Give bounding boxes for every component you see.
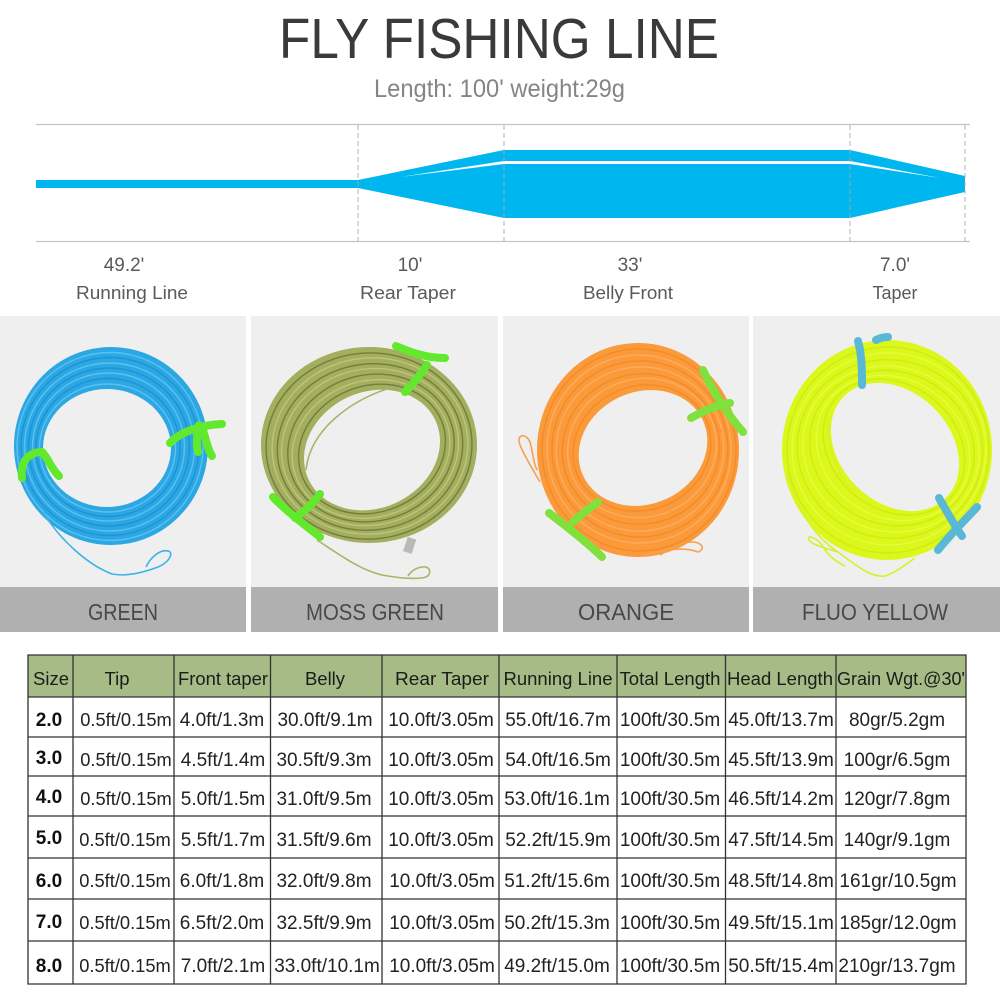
- row size 4.0: 4.0: [36, 787, 62, 808]
- icon: blue coil: [14, 347, 208, 575]
- row size 6.0: 6.0: [36, 871, 62, 892]
- row size 2.0: 4.0ft/1.3m: [180, 710, 264, 731]
- row size 8.0: 7.0ft/2.1m: [181, 956, 265, 977]
- row size 2.0: 100ft/30.5m: [620, 710, 720, 731]
- table grid: [28, 655, 966, 984]
- specification table: [28, 655, 966, 984]
- panel: orange line coil: [503, 316, 749, 632]
- row size 4.0: 46.5ft/14.2m: [728, 789, 834, 810]
- subtitle: Length: 100' weight:29g: [374, 75, 625, 103]
- table header row: [28, 655, 966, 697]
- row size 2.0: [36, 709, 945, 731]
- row size 4.0: 120gr/7.8gm: [844, 789, 950, 810]
- row size 8.0: 33.0ft/10.1m: [274, 956, 380, 977]
- row size 4.0: 53.0ft/16.1m: [504, 789, 610, 810]
- row size 5.0: 140gr/9.1gm: [844, 830, 950, 851]
- row size 2.0: 0.5ft/0.15m: [80, 709, 172, 730]
- row size 7.0: 49.5ft/15.1m: [728, 913, 834, 934]
- row size 3.0: 10.0ft/3.05m: [388, 750, 494, 771]
- icon: orange coil: [519, 343, 741, 557]
- row size 8.0: 50.5ft/15.4m: [728, 956, 834, 977]
- row size 2.0: 10.0ft/3.05m: [388, 710, 494, 731]
- row size 5.0: 0.5ft/0.15m: [79, 829, 171, 850]
- section labels: Belly Front: [583, 283, 673, 303]
- row size 3.0: 3.0: [36, 748, 62, 769]
- row size 5.0: 31.5ft/9.6m: [276, 830, 372, 851]
- table header row: Belly: [305, 668, 346, 689]
- row size 5.0: [36, 828, 950, 851]
- row size 6.0: 100ft/30.5m: [620, 871, 720, 892]
- row size 7.0: [36, 912, 957, 934]
- row size 8.0: 0.5ft/0.15m: [79, 955, 171, 976]
- section labels: 10': [398, 255, 422, 276]
- table header row: Grain Wgt.@30': [837, 668, 965, 689]
- row size 7.0: 32.5ft/9.9m: [276, 913, 372, 934]
- icon: green pipe cleaners: [22, 424, 222, 478]
- row size 8.0: 49.2ft/15.0m: [504, 956, 610, 977]
- panel: moss green line coil: [251, 316, 498, 632]
- row size 6.0: 0.5ft/0.15m: [79, 870, 171, 891]
- table header row: Running Line: [504, 668, 612, 689]
- row size 7.0: 7.0: [36, 912, 62, 933]
- row size 4.0: 100ft/30.5m: [620, 789, 720, 810]
- panel: fluo yellow line coil: FLUO YELLOW: [802, 599, 948, 625]
- row size 2.0: 45.0ft/13.7m: [728, 710, 834, 731]
- row size 7.0: 10.0ft/3.05m: [389, 913, 495, 934]
- row size 8.0: 10.0ft/3.05m: [389, 956, 495, 977]
- panel: green line coil: GREEN: [88, 599, 158, 625]
- row size 5.0: 5.5ft/1.7m: [181, 830, 265, 851]
- panel: green line coil: [0, 316, 246, 632]
- row size 3.0: 45.5ft/13.9m: [728, 750, 834, 771]
- white highlight stripe: [400, 161, 940, 178]
- row size 8.0: [36, 955, 956, 977]
- row size 2.0: 2.0: [36, 710, 62, 731]
- row size 8.0: 100ft/30.5m: [620, 956, 720, 977]
- icon: blue pipe cleaners: [858, 337, 977, 550]
- section labels: Taper: [872, 283, 918, 303]
- tapered line profile: [36, 150, 965, 218]
- section labels: 49.2': [104, 255, 144, 276]
- row size 4.0: 5.0ft/1.5m: [181, 789, 265, 810]
- row size 2.0: 80gr/5.2gm: [849, 710, 945, 731]
- row size 4.0: [36, 787, 950, 810]
- row size 6.0: [36, 870, 957, 892]
- icon: green pipe cleaners: [549, 370, 743, 557]
- row size 4.0: 0.5ft/0.15m: [80, 788, 172, 809]
- row size 3.0: 0.5ft/0.15m: [80, 749, 172, 770]
- row size 2.0: 30.0ft/9.1m: [277, 710, 373, 731]
- row size 4.0: 10.0ft/3.05m: [388, 789, 494, 810]
- panel: moss green line coil: MOSS GREEN: [306, 599, 444, 625]
- icon: green pipe cleaners: [273, 346, 445, 537]
- icon: moss coil: [260, 346, 478, 578]
- title: FLY FISHING LINE: [279, 7, 719, 71]
- row size 6.0: 6.0ft/1.8m: [180, 871, 264, 892]
- table header row: Total Length: [620, 668, 720, 689]
- row size 3.0: 4.5ft/1.4m: [181, 750, 265, 771]
- row size 5.0: 10.0ft/3.05m: [388, 830, 494, 851]
- icon: yellow coil: [775, 336, 1000, 576]
- row size 6.0: 161gr/10.5gm: [839, 871, 957, 892]
- row size 4.0: 31.0ft/9.5m: [276, 789, 372, 810]
- row size 5.0: 100ft/30.5m: [620, 830, 720, 851]
- row size 8.0: 8.0: [36, 956, 62, 977]
- row size 3.0: 100ft/30.5m: [620, 750, 720, 771]
- section labels: 33': [618, 255, 642, 276]
- row size 6.0: 48.5ft/14.8m: [728, 871, 834, 892]
- section labels: 7.0': [880, 255, 910, 276]
- row size 3.0: 100gr/6.5gm: [844, 750, 950, 771]
- table header row: Head Length: [727, 668, 833, 689]
- row size 7.0: 0.5ft/0.15m: [79, 912, 171, 933]
- row size 7.0: 6.5ft/2.0m: [180, 913, 264, 934]
- line taper diagram: [36, 124, 970, 242]
- section labels: [76, 255, 918, 303]
- panel: orange line coil: ORANGE: [578, 599, 674, 625]
- row size 3.0: [36, 748, 950, 771]
- table header row: Size: [33, 668, 69, 689]
- product tag: [403, 537, 416, 554]
- table header row: Rear Taper: [395, 668, 489, 689]
- row size 5.0: 47.5ft/14.5m: [728, 830, 834, 851]
- row size 5.0: 5.0: [36, 828, 62, 849]
- table header row: Front taper: [178, 668, 268, 689]
- row size 6.0: 32.0ft/9.8m: [276, 871, 372, 892]
- row size 8.0: 210gr/13.7gm: [838, 956, 956, 977]
- row size 7.0: 100ft/30.5m: [620, 913, 720, 934]
- section labels: Rear Taper: [360, 283, 456, 303]
- row size 6.0: 51.2ft/15.6m: [504, 871, 610, 892]
- row size 3.0: 30.5ft/9.3m: [276, 750, 372, 771]
- table header row: Tip: [104, 668, 130, 689]
- row size 7.0: 50.2ft/15.3m: [504, 913, 610, 934]
- section labels: Running Line: [76, 283, 188, 303]
- row size 2.0: 55.0ft/16.7m: [505, 710, 611, 731]
- panel: fluo yellow line coil: [753, 316, 1000, 632]
- row size 5.0: 52.2ft/15.9m: [505, 830, 611, 851]
- row size 3.0: 54.0ft/16.5m: [505, 750, 611, 771]
- row size 6.0: 10.0ft/3.05m: [389, 871, 495, 892]
- row size 7.0: 185gr/12.0gm: [839, 913, 957, 934]
